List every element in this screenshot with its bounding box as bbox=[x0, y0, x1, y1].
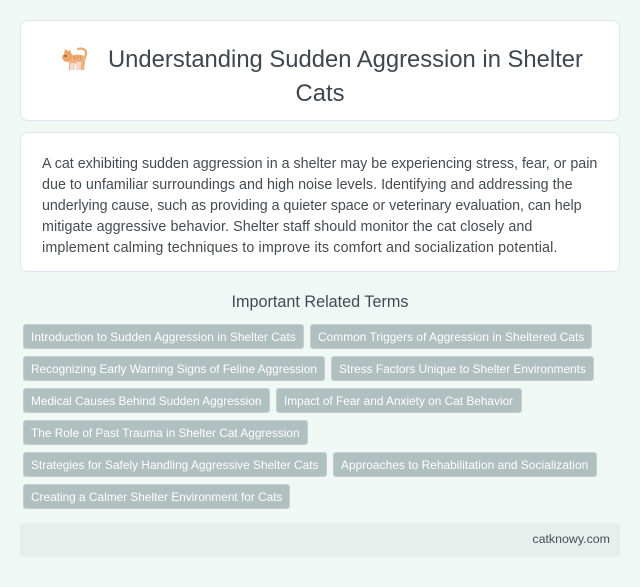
tag bbox=[23, 484, 290, 509]
tag: Strategies for Safely Handling Aggressive Shelter Cats bbox=[31, 458, 318, 472]
footer bar bbox=[20, 523, 620, 557]
tag bbox=[23, 356, 325, 381]
tag bbox=[23, 324, 304, 349]
tag: Creating a Calmer Shelter Environment for Cats bbox=[31, 490, 282, 504]
summary card bbox=[20, 132, 620, 272]
tag bbox=[331, 356, 594, 381]
tag: Stress Factors Unique to Shelter Environments bbox=[339, 362, 586, 376]
summary paragraph: A cat exhibiting sudden aggression in a shelter may be experiencing stress, fear, or pain bbox=[42, 156, 597, 172]
tag: Impact of Fear and Anxiety on Cat Behavior bbox=[284, 394, 513, 408]
tag bbox=[23, 420, 308, 445]
tag: The Role of Past Trauma in Shelter Cat Aggression bbox=[31, 426, 300, 440]
title second line: Cats bbox=[296, 80, 344, 107]
title card bbox=[20, 20, 620, 121]
summary paragraph: due to unfamiliar surroundings and high noise levels. Identifying and addressing the bbox=[42, 177, 573, 193]
tag bbox=[23, 452, 327, 477]
title text: Understanding Sudden Aggression in Shelter bbox=[108, 46, 583, 73]
tag bbox=[276, 388, 522, 413]
tag bbox=[310, 324, 592, 349]
icon: cat bbox=[62, 48, 88, 70]
tag: Common Triggers of Aggression in Sheltered Cats bbox=[318, 330, 584, 344]
summary paragraph bbox=[42, 156, 597, 256]
related terms heading: Important Related Terms bbox=[232, 293, 408, 311]
tag: Recognizing Early Warning Signs of Feline Aggression bbox=[31, 362, 317, 376]
tag bbox=[333, 452, 597, 477]
footer site name: catknowy.com bbox=[532, 532, 610, 546]
tag bbox=[23, 388, 270, 413]
summary paragraph: underlying cause, such as providing a quieter space or veterinary evaluation, can help bbox=[42, 198, 582, 214]
tag: Approaches to Rehabilitation and Socialization bbox=[341, 458, 588, 472]
tag: Medical Causes Behind Sudden Aggression bbox=[31, 394, 261, 408]
summary paragraph: mitigate aggressive behavior. Shelter staff should monitor the cat closely and bbox=[42, 219, 532, 235]
tag: Introduction to Sudden Aggression in Shelter Cats bbox=[31, 330, 296, 344]
summary paragraph: implement calming techniques to improve its comfort and socialization potential. bbox=[42, 240, 558, 256]
